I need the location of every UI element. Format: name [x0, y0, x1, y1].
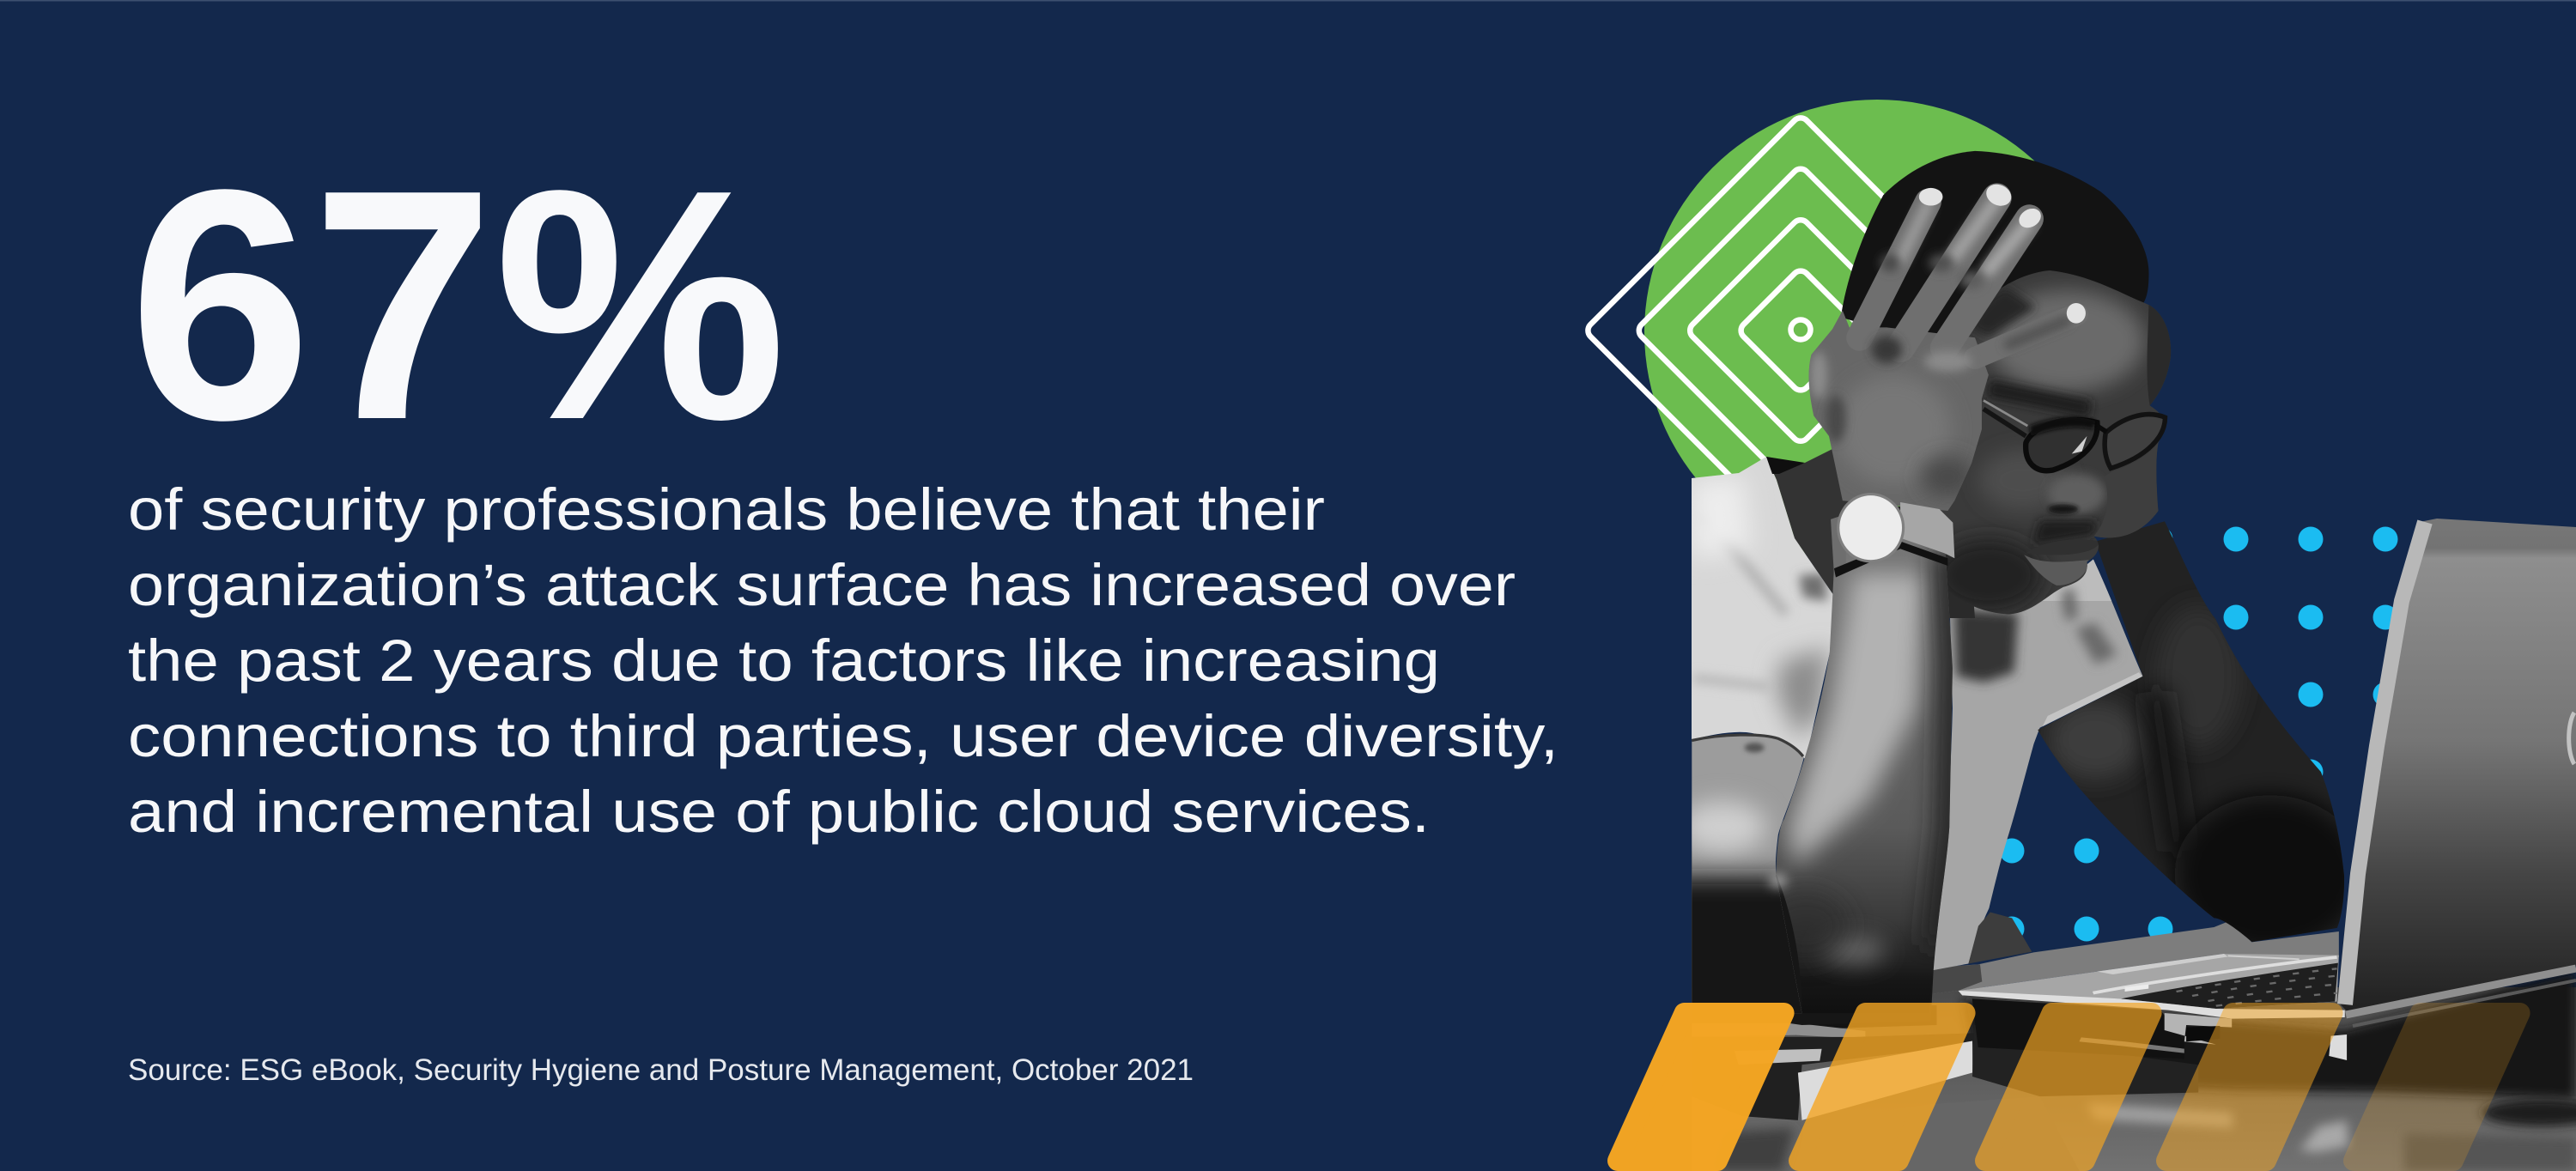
source note: Source: ESG eBook, Security Hygiene and Posture Management, October 2021 [128, 1053, 1194, 1087]
face [1935, 270, 2171, 615]
neck shadow [1766, 449, 1849, 594]
hand on head [1809, 197, 2077, 511]
collar shadow [1766, 457, 1805, 474]
laptop base, table behind and ports [1915, 920, 2347, 1060]
top edge line [0, 0, 2576, 2]
far arm [2038, 521, 2344, 942]
forearm [1776, 539, 1953, 978]
torso dark base and elbow [1692, 851, 1935, 1025]
stripe 5 [2354, 1013, 2520, 1161]
hair [1841, 151, 2148, 341]
orange stripes [1618, 1013, 2520, 1161]
concentric diamonds [1584, 114, 2017, 547]
hand resting on table [1968, 912, 2032, 963]
under-chin chest shadow [1889, 507, 1975, 618]
fingernails [1919, 180, 2086, 324]
books on table [1692, 1005, 2198, 1171]
body text: the past 2 years due to factors like increasing [128, 628, 1440, 694]
near arm [1643, 534, 1960, 1075]
left shirt sleeve [1692, 457, 1832, 759]
shirt front [1929, 549, 2151, 978]
body text: organization’s attack surface has increased over [128, 552, 1516, 618]
stripe 3 [1985, 1013, 2152, 1161]
body text [128, 476, 1558, 845]
laptop lid [2337, 519, 2576, 1026]
headline stat: 67% [129, 121, 787, 488]
upper arm [1692, 737, 1804, 1013]
stripe 2 [1799, 1013, 1965, 1161]
body and arms layer [1929, 513, 2365, 978]
body text: and incremental use of public cloud services. [128, 779, 1430, 845]
wrist watch [1831, 493, 1954, 577]
blue dot grid [1999, 527, 2397, 941]
body text: connections to third parties, user device diversity, [128, 703, 1558, 769]
elbow crease highlight [1770, 873, 1787, 888]
table surface foreground [1692, 970, 2576, 1171]
green circle [1644, 100, 2110, 565]
body text: of security professionals believe that their [128, 476, 1325, 543]
stripe 1 [1618, 1013, 1784, 1161]
glasses [1984, 400, 2165, 470]
stripe 4 [2166, 1013, 2333, 1161]
sleeve hem [1692, 735, 1803, 756]
head [1809, 151, 2171, 615]
photo: stressed man at laptop [1643, 151, 2576, 1171]
